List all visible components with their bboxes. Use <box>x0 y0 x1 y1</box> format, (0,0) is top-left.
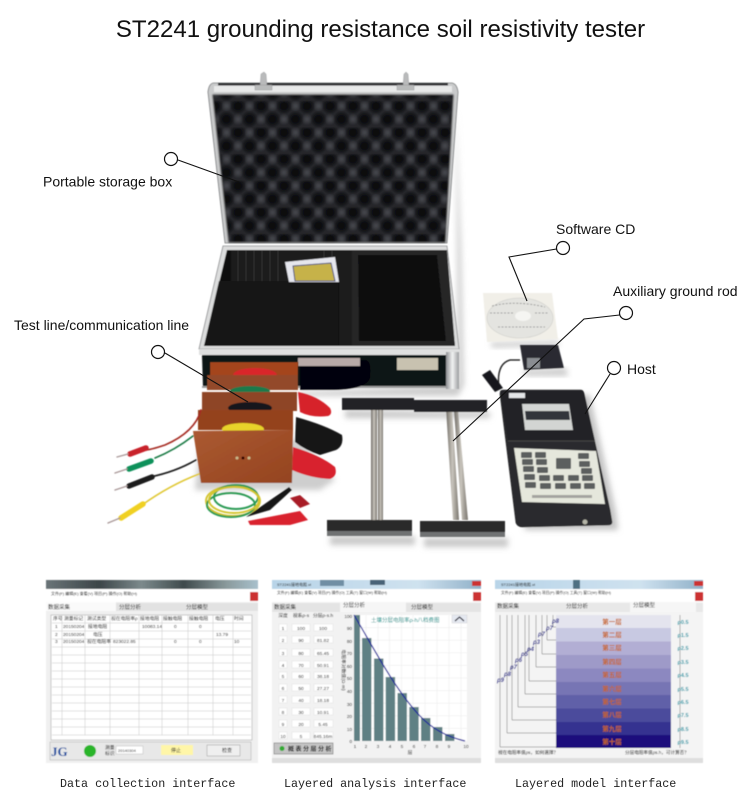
layer bands: 第九层 <box>602 724 622 733</box>
bar chart: 50 <box>347 676 352 681</box>
layer table: 27.27 <box>317 686 329 692</box>
screenshot: layered analysis: ST2241接地电阻.vi <box>277 581 311 587</box>
layer bands: 第七层 <box>602 697 622 706</box>
bar chart: 土壤分层电阻率ρ-h八档费图 <box>371 616 440 624</box>
screenshot: layered model: 文件(F) 编辑(E) 查看(V) 项目(P) 操作(O) 工具(T) 窗口(W) 帮助(H) <box>501 590 612 595</box>
bar chart: 70 <box>347 651 352 656</box>
depth ladder: ρ7 <box>545 626 554 632</box>
right rho labels: ρ2.5 <box>677 646 689 652</box>
layer bands <box>556 615 671 748</box>
control strip: 标识 <box>105 750 115 757</box>
left rod pair <box>371 408 468 520</box>
bar chart: 40 <box>347 689 352 694</box>
wire reel back plates <box>198 362 298 435</box>
title bar <box>495 580 703 589</box>
layer table: 50 <box>298 686 304 692</box>
layer table: 4 <box>282 663 285 669</box>
software CD <box>483 293 560 348</box>
data table: 823022.85 <box>113 639 136 645</box>
layer table: 60 <box>298 674 304 680</box>
layer table: 10.91 <box>317 710 329 716</box>
callout: host: Host <box>627 361 656 377</box>
display panel <box>522 404 573 430</box>
depth ladder: ρ8 <box>503 672 512 678</box>
data table: 时间 <box>234 615 244 622</box>
control strip: 20140304 <box>118 748 137 753</box>
layer table: 2 <box>282 638 285 644</box>
tabs: 分层模型 <box>186 603 209 611</box>
layer table: 81.82 <box>317 638 329 644</box>
box front <box>199 349 459 390</box>
caption: layered model: Layered model interface <box>515 777 676 791</box>
right rho labels: ρ7.5 <box>677 713 689 719</box>
tabs: 分层分析 <box>119 603 142 611</box>
data table: 序号 <box>53 615 63 622</box>
bar chart: 80 <box>347 639 352 644</box>
layer table: 1 <box>282 626 285 632</box>
layer table: 视系ρ-s <box>293 612 310 619</box>
tabs: 数据采集 <box>48 603 71 611</box>
tabs <box>46 602 258 611</box>
title: ST2241 grounding resistance soil resistivity tester <box>116 16 645 43</box>
screenshot: layered analysis: 文件(F) 编辑(E) 查看(V) 项目(P) 操作(O) 工具(T) 窗口(W) 帮助(H) <box>277 590 388 595</box>
bar chart: 8 <box>436 744 439 750</box>
data table: 10083.14 <box>142 624 162 630</box>
layer table: 40 <box>298 698 304 704</box>
data table: 3 <box>55 639 58 645</box>
layer bands: 第十层 <box>602 737 622 746</box>
callout: portable storage box <box>43 152 239 190</box>
JG logo: JG <box>51 744 68 759</box>
screenshot: layered model: 分层电阻率值ρs.h，可计算否？ <box>625 749 689 756</box>
title bar <box>272 580 481 589</box>
callout: test line <box>14 317 248 402</box>
lid latches <box>255 72 414 90</box>
status light <box>84 745 96 757</box>
layer table: 18.18 <box>317 698 329 704</box>
data table: 接地电阻 <box>88 623 107 630</box>
bar chart: 1 <box>354 744 357 750</box>
depth ladder: ρ7 <box>537 632 546 638</box>
bar chart: 30 <box>347 702 352 707</box>
box shadow <box>300 110 464 396</box>
bar chart <box>340 614 469 756</box>
analysis button: 概表分层分析 <box>288 745 333 753</box>
callout: software CD: Software CD <box>556 221 635 237</box>
bar chart: 9 <box>448 744 451 750</box>
tabs: 分层分析 <box>566 602 589 610</box>
control strip: 检查 <box>222 747 232 754</box>
control strip <box>50 742 251 760</box>
data table <box>51 615 252 740</box>
layer table: 30 <box>298 710 304 716</box>
data table: 接触电阻 <box>163 615 182 622</box>
rods shadow <box>330 410 508 547</box>
data table: 2 <box>55 632 58 638</box>
bar chart: 7 <box>424 744 427 750</box>
plates shadow <box>195 440 335 490</box>
layer table: 7 <box>282 698 285 704</box>
layer bands: 第八层 <box>602 710 622 719</box>
layer table: 100 <box>297 626 305 632</box>
layer table: 6 <box>282 686 285 692</box>
layer table: 80 <box>298 651 304 657</box>
right rho labels: ρ1.5 <box>677 633 689 639</box>
right rho labels: ρ3.5 <box>677 660 689 666</box>
bar chart: 100 <box>344 614 352 619</box>
data table: 20150204 <box>63 632 85 638</box>
data table: 0 <box>174 639 177 645</box>
screenshot: layered model: ST2241接地电阻.vi <box>501 581 535 587</box>
bar chart: 10 <box>347 727 352 732</box>
title bar <box>46 580 258 589</box>
power adapter <box>482 345 568 392</box>
data table: 10 <box>234 639 240 645</box>
tabs <box>495 601 703 612</box>
layer bands: 第五层 <box>602 670 622 679</box>
depth ladder <box>496 615 680 748</box>
layer table: 70 <box>298 663 304 669</box>
data table: 视在电阻率 <box>87 638 111 645</box>
layer table: 3 <box>282 651 285 657</box>
bar chart: 4 <box>389 744 392 750</box>
data table: 测量标记 <box>64 615 83 622</box>
screenshot: data collection <box>46 580 258 763</box>
depth ladder: ρ9 <box>496 678 505 684</box>
right rho labels: ρ4.5 <box>677 673 689 679</box>
right rho labels: ρ9.5 <box>677 740 689 746</box>
depth ladder: ρ3 <box>532 640 541 646</box>
depth ladder: ρ5 <box>520 652 529 658</box>
right rho labels: ρ0.5 <box>677 620 689 626</box>
layer table: 深度 <box>278 612 288 619</box>
depth ladder: ρ8 <box>551 619 560 625</box>
sticker <box>509 393 525 398</box>
tabs: 数据采集 <box>497 602 520 610</box>
callout: portable storage box: Portable storage box <box>43 174 172 190</box>
callout: auxiliary ground rod <box>453 283 738 441</box>
bar chart: 20 <box>347 714 352 719</box>
test lines and plates <box>108 362 342 525</box>
colored leads <box>108 410 201 523</box>
bar chart: 2 <box>365 744 368 750</box>
lid <box>208 83 458 243</box>
bar chart: 60 <box>347 664 352 669</box>
data table: 电压 <box>93 631 103 638</box>
layer table: 8 <box>282 710 285 716</box>
base tray <box>199 246 459 349</box>
bar chart: 层 <box>408 750 413 756</box>
data table: 0 <box>174 624 177 630</box>
stop button <box>161 745 193 755</box>
layer table: 5.45 <box>318 722 328 728</box>
callout: software CD <box>509 221 635 301</box>
bar chart: 0 <box>349 739 352 744</box>
layer table: 10 <box>280 734 286 740</box>
print button <box>207 745 240 756</box>
coiled ground wire <box>206 485 260 517</box>
bar chart: 90 <box>347 626 352 631</box>
depth ladder: ρ7 <box>509 665 518 671</box>
layer bands: 第三层 <box>602 643 622 652</box>
layer table: 100 <box>319 626 327 632</box>
data table: 20150204 <box>63 639 85 645</box>
data table: 0 <box>199 624 202 630</box>
screenshot: data collection: 文件(F) 编辑(E) 查看(V) 项目(P) 操作(O) 帮助(H) <box>51 590 138 596</box>
right rho labels: ρ8.5 <box>677 727 689 733</box>
callout: auxiliary ground rod: Auxiliary ground rod <box>613 283 738 299</box>
layer bands: 第四层 <box>602 657 622 666</box>
bar chart: 10 <box>463 744 469 750</box>
front plate <box>193 430 293 483</box>
tabs <box>272 601 481 612</box>
layer table: 65.45 <box>317 651 329 657</box>
tabs: 分层模型 <box>633 601 656 609</box>
screenshot: layered model <box>495 580 703 763</box>
tabs: 分层模型 <box>411 603 434 611</box>
depth ladder: ρ4 <box>526 647 535 653</box>
data table: 1 <box>55 624 58 630</box>
layer table <box>278 612 333 740</box>
taskbar <box>272 758 481 763</box>
small clips on coil <box>246 487 310 525</box>
layer table: 分层ρ-s.h <box>313 612 333 619</box>
data table: 接触电阻 <box>189 615 208 622</box>
data table: 视在电阻率ρ <box>111 615 138 622</box>
layer table: 5 <box>300 734 303 740</box>
data table: 0 <box>199 639 202 645</box>
storage box <box>199 72 464 396</box>
host device <box>500 390 618 530</box>
caption: layered analysis: Layered analysis interface <box>284 777 466 791</box>
right rho labels: ρ6.5 <box>677 700 689 706</box>
layer table: 5 <box>282 674 285 680</box>
layer bands: 第二层 <box>602 630 622 639</box>
depth ladder: ρ6 <box>514 658 523 664</box>
top bars <box>342 398 487 412</box>
tabs: 数据采集 <box>274 603 297 611</box>
layer table: 38.18 <box>317 674 329 680</box>
combination lock <box>397 358 438 370</box>
data table: 电压 <box>215 615 225 622</box>
layer table: 845.16m <box>314 734 332 740</box>
device body <box>500 390 612 527</box>
bar chart: 电阻率对数值(Ω·m) <box>340 649 347 691</box>
analysis button <box>274 743 333 754</box>
caption: data collection: Data collection interface <box>60 777 235 791</box>
auxiliary ground rods <box>327 398 508 547</box>
data table: 20150204 <box>63 624 85 630</box>
bottom bars <box>327 520 505 537</box>
right rho labels: ρ5.5 <box>677 687 689 693</box>
data table: 测试类型 <box>87 615 106 622</box>
data table: 接地电阻 <box>140 615 159 622</box>
right rho labels <box>677 620 689 746</box>
control strip: 停止 <box>171 747 181 754</box>
keypad <box>514 448 605 504</box>
bottom note: 視在电阻率值ρs，如何選擇？ <box>498 749 558 756</box>
manual in tray <box>285 257 339 282</box>
bar chart: 6 <box>413 744 416 750</box>
layer table: 20 <box>298 722 304 728</box>
layer table: 9 <box>282 722 285 728</box>
callout: test line: Test line/communication line <box>14 317 189 333</box>
layer table: 50.91 <box>317 663 329 669</box>
screenshot: layered analysis <box>272 580 481 763</box>
layer bands: 第一层 <box>602 617 622 626</box>
callout: host <box>585 361 656 414</box>
bar chart: 3 <box>377 744 380 750</box>
alligator clips <box>292 392 342 479</box>
layer bands: 第六层 <box>602 684 622 693</box>
control strip: 测量 <box>105 744 115 751</box>
layer table: 90 <box>298 638 304 644</box>
tabs: 分层分析 <box>343 601 366 609</box>
callout labels <box>14 152 738 441</box>
data table: 13.79 <box>216 632 228 638</box>
bar chart: 5 <box>401 744 404 750</box>
